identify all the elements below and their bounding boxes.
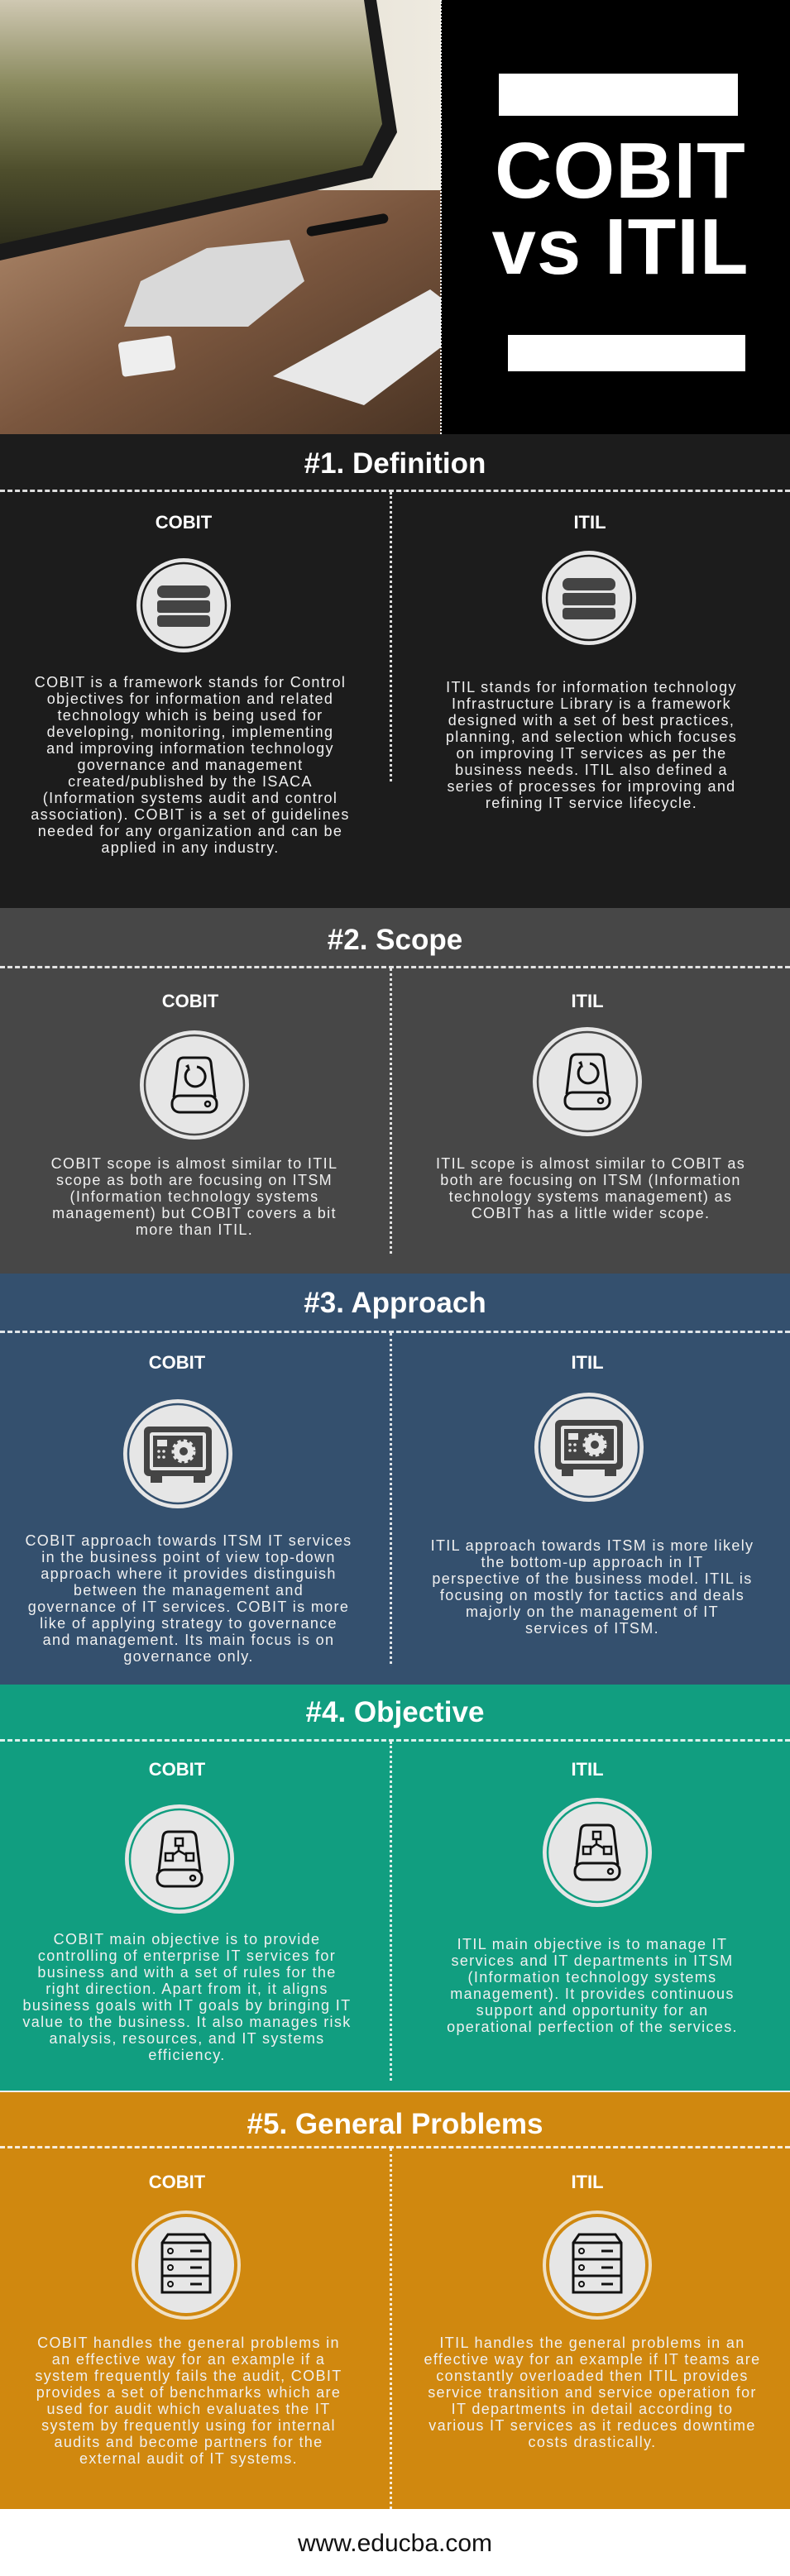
text: ITIL definition: designed with a set of best practices, [448, 712, 735, 729]
text: ITIL scope: COBIT has a little wider scope. [472, 1205, 710, 1221]
text: COBIT objective: efficiency. [148, 2047, 226, 2063]
text: COBIT problems: used for audit which evaluates the IT [46, 2401, 331, 2417]
panel: approach [0, 1274, 790, 1685]
text: COBIT scope: management) but COBIT covers a bit [52, 1205, 337, 1221]
icon: drive network [125, 1804, 234, 1914]
text: ITIL scope [436, 1155, 745, 1221]
label: COBIT: COBIT [156, 512, 212, 533]
text: ITIL definition: refining IT service lifecycle. [486, 795, 697, 811]
icon: server [543, 2210, 652, 2320]
text: COBIT approach: between the management and [74, 1582, 304, 1599]
panel: scope [0, 908, 790, 1274]
label: COBIT: COBIT [149, 1759, 205, 1780]
text: COBIT definition: created/published by the ISACA [68, 773, 313, 790]
text: COBIT definition: COBIT is a framework stands for Control [35, 674, 346, 691]
label: ITIL: ITIL [571, 1352, 604, 1373]
text: COBIT approach: and management. Its main focus is on [43, 1632, 334, 1648]
heading: #4. Objective [306, 1696, 484, 1728]
text: ITIL definition: on improving IT services as per the [456, 745, 727, 762]
text: COBIT objective [22, 1931, 352, 2063]
text: ITIL objective [447, 1936, 738, 2035]
text: ITIL approach: ITIL approach towards ITSM is more likely [431, 1537, 754, 1554]
text: ITIL definition: ITIL stands for information technology [446, 679, 737, 695]
title text: COBIT [495, 127, 746, 215]
photo: desk with monitor [0, 0, 441, 434]
text: COBIT definition: and improving information technology [46, 740, 334, 757]
heading: #3. Approach [304, 1287, 486, 1319]
text: COBIT objective: analysis, resources, and IT systems [49, 2030, 325, 2047]
text: ITIL definition: business needs. ITIL also defined a [455, 762, 728, 778]
heading: #5. General Problems [247, 2108, 543, 2140]
text: COBIT definition: developing, monitoring, implementing [47, 724, 333, 740]
photo divider [440, 0, 442, 434]
text: COBIT scope: (Information technology systems [70, 1188, 318, 1205]
text: COBIT problems: an effective way for an example if a [52, 2351, 325, 2368]
text: ITIL objective: operational perfection of the services. [447, 2019, 738, 2035]
panel: objective [0, 1685, 790, 2091]
text: COBIT problems: audits and become partners for the [54, 2434, 323, 2450]
text: ITIL problems: ITIL handles the general problems in an [439, 2335, 745, 2351]
text: COBIT objective: business goals with IT goals by bringing IT [23, 1997, 351, 2014]
text: ITIL objective: support and opportunity for an [476, 2002, 708, 2019]
text: COBIT definition: needed for any organization and can be [38, 823, 342, 839]
text: COBIT approach: COBIT approach towards ITSM IT services [25, 1532, 352, 1549]
text: COBIT approach [25, 1532, 352, 1665]
icon: drive network [543, 1798, 652, 1907]
text: ITIL problems: effective way for an example if IT teams are [424, 2351, 760, 2368]
icon: database [542, 551, 636, 645]
text: ITIL scope: ITIL scope is almost similar to COBIT as [436, 1155, 745, 1172]
title text: vs ITIL [491, 203, 749, 291]
text: ITIL approach: perspective of the business model. ITIL is [432, 1570, 753, 1587]
label: ITIL: ITIL [571, 1759, 604, 1780]
text: COBIT scope: scope as both are focusing on ITSM [56, 1172, 333, 1188]
heading: #2. Scope [328, 924, 462, 956]
icon: database [136, 558, 231, 652]
text: COBIT scope [51, 1155, 338, 1238]
text: COBIT problems: system by frequently using for internal [41, 2417, 336, 2434]
text: ITIL approach: majorly on the management of IT [466, 1603, 719, 1620]
label: ITIL: ITIL [571, 2172, 604, 2192]
text: ITIL scope: both are focusing on ITSM (Information [440, 1172, 741, 1188]
text: COBIT scope: COBIT scope is almost similar to ITIL [51, 1155, 338, 1172]
text: COBIT approach: governance of IT services. COBIT is more [28, 1599, 349, 1615]
icon: drive refresh [140, 1030, 249, 1140]
bottom bar [508, 335, 745, 371]
text: COBIT definition: technology which is being used for [57, 707, 323, 724]
text: ITIL objective: management). It provides continuous [450, 1986, 735, 2002]
text: ITIL objective: ITIL main objective is to manage IT [457, 1936, 727, 1952]
text: COBIT objective: value to the business. It also manages risk [22, 2014, 352, 2030]
text: ITIL definition: series of processes for improving and [447, 778, 736, 795]
text: COBIT objective: COBIT main objective is to provide [54, 1931, 320, 1948]
text: ITIL objective: services and IT departments in ITSM [451, 1952, 734, 1969]
text: ITIL problems: IT departments in detail according to [452, 2401, 733, 2417]
text: ITIL objective: (Information technology systems [468, 1969, 716, 1986]
icon: safe [123, 1399, 232, 1508]
text: COBIT approach: approach where it provides distinguish [41, 1565, 337, 1582]
text: ITIL definition: planning, and selection which focuses [446, 729, 737, 745]
text: ITIL problems: costs drastically. [528, 2434, 657, 2450]
text: ITIL definition [446, 679, 737, 811]
text: ITIL definition: Infrastructure Library is a framework [452, 695, 731, 712]
text: COBIT approach: in the business point of view top-down [41, 1549, 336, 1565]
text: COBIT objective: business and with a set of rules for the [37, 1964, 337, 1981]
text: ITIL approach: the bottom-up approach in IT [481, 1554, 703, 1570]
text: COBIT problems: provides a set of benchmarks which are [36, 2384, 341, 2401]
icon: drive refresh [533, 1027, 642, 1136]
text: COBIT definition: objectives for information and related [47, 691, 333, 707]
text: ITIL problems: service transition and service operation for [428, 2384, 757, 2401]
footer: website: www.educba.com [298, 2530, 492, 2557]
heading: #1. Definition [304, 447, 486, 480]
top bar [499, 74, 738, 116]
text: COBIT approach: governance only. [123, 1648, 254, 1665]
panel: definition [0, 434, 790, 908]
title block: COBIT vs ITIL [491, 74, 749, 371]
icon: server [132, 2210, 241, 2320]
icon: safe [534, 1393, 644, 1502]
text: ITIL problems: various IT services as it reduces downtime [429, 2417, 756, 2434]
text: COBIT problems: COBIT handles the general problems in [37, 2335, 340, 2351]
text: COBIT scope: more than ITIL. [136, 1221, 253, 1238]
text: ITIL approach: services of ITSM. [525, 1620, 659, 1637]
text: COBIT definition [31, 674, 350, 856]
label: COBIT: COBIT [162, 991, 218, 1011]
text: ITIL problems: constantly overloaded then ITIL provides [436, 2368, 749, 2384]
text: COBIT objective: controlling of enterprise IT services for [38, 1948, 336, 1964]
text: COBIT problems: external audit of IT systems. [79, 2450, 298, 2467]
text: COBIT definition: applied in any industry. [101, 839, 280, 856]
text: COBIT problems [35, 2335, 342, 2467]
text: COBIT definition: governance and management [78, 757, 303, 773]
hero header [0, 0, 790, 434]
label: COBIT: COBIT [149, 1352, 205, 1373]
text: COBIT objective: right direction. Apart from it, it aligns [45, 1981, 328, 1997]
title text [491, 127, 749, 291]
text: COBIT definition: association). COBIT is a set of guidelines [31, 806, 350, 823]
text: ITIL scope: technology systems management) as [449, 1188, 732, 1205]
label: ITIL: ITIL [571, 991, 604, 1011]
panel: general problems [0, 2091, 790, 2509]
text: COBIT approach: like of applying strategy to governance [40, 1615, 338, 1632]
text: ITIL problems [424, 2335, 760, 2450]
text: COBIT definition: (Information systems audit and control [43, 790, 338, 806]
text: COBIT problems: system frequently fails the audit, COBIT [35, 2368, 342, 2384]
text: ITIL approach [431, 1537, 754, 1637]
text: ITIL approach: focusing on mostly for tactics and deals [440, 1587, 745, 1603]
label: ITIL: ITIL [573, 512, 606, 533]
label: COBIT: COBIT [149, 2172, 205, 2192]
